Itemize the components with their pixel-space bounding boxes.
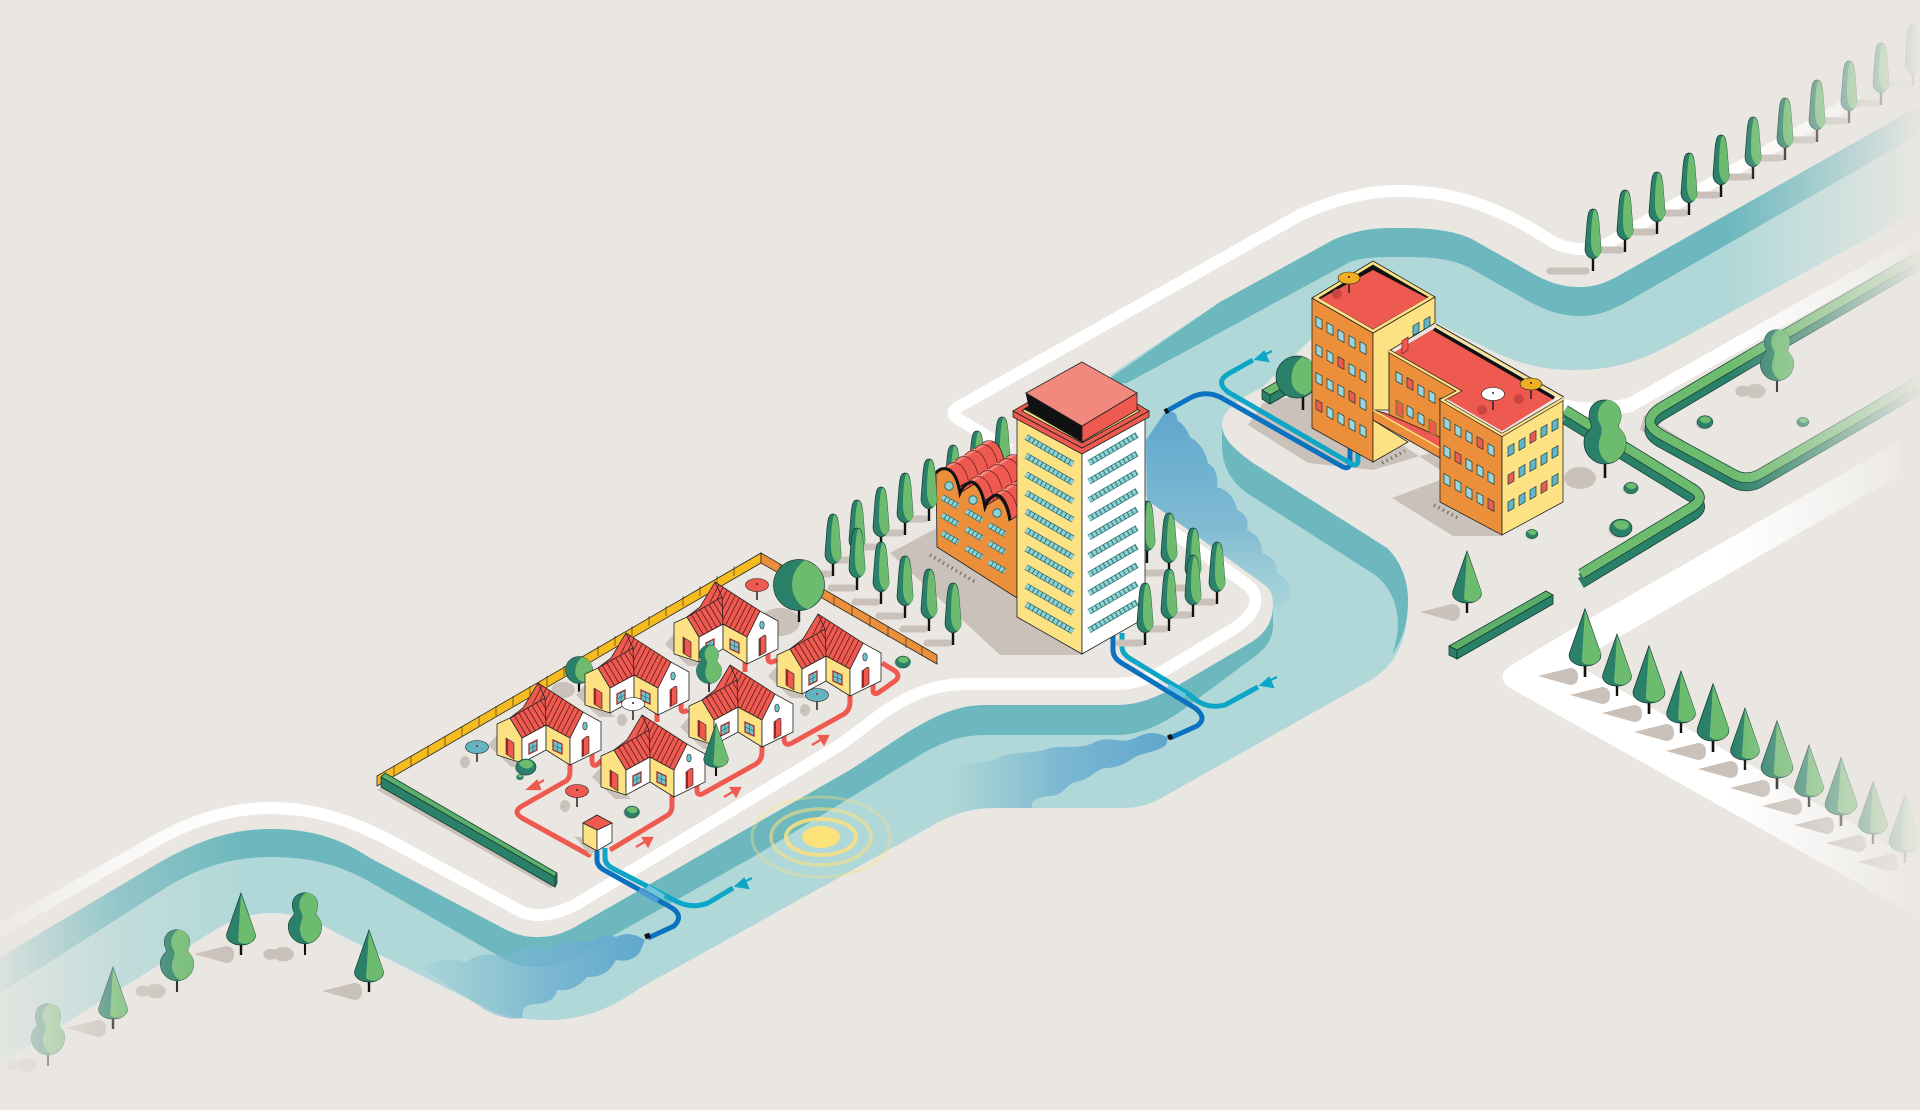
tower roof slab bbox=[1026, 362, 1137, 442]
arrow bbox=[812, 736, 828, 745]
water pipes: left outlet bbox=[597, 848, 752, 938]
bushes: by front-left house bbox=[514, 759, 536, 780]
tree: bubble right of office bbox=[1564, 400, 1626, 489]
tower yellow face bbox=[1017, 418, 1082, 654]
arrow bbox=[528, 780, 544, 789]
building shadows bbox=[377, 390, 1745, 888]
bush: near pump box bbox=[623, 806, 640, 819]
arrow bbox=[636, 838, 652, 847]
river bank band: upper bbox=[1100, 100, 1920, 385]
parasol: teal left bbox=[460, 740, 488, 768]
block B windows bbox=[1396, 372, 1436, 436]
balcony bbox=[1373, 410, 1440, 458]
shadow: factory and tower bbox=[890, 528, 1082, 655]
bush: by rear right house bbox=[894, 656, 910, 669]
factory bbox=[929, 440, 1017, 598]
trees: cypress row upper right bbox=[1550, 24, 1920, 271]
discharge wash: middle outlet bbox=[930, 733, 1168, 827]
tree: bubble between houses bbox=[696, 645, 722, 692]
discharge wash: left outlet bbox=[422, 934, 645, 1019]
factory front arches bbox=[936, 469, 1010, 520]
arrow bbox=[724, 788, 740, 797]
block A windows bbox=[1316, 316, 1366, 438]
edge fade: right bbox=[1730, 0, 1920, 1110]
hedge: front-left bbox=[381, 773, 557, 887]
trees: lower left bank bbox=[6, 893, 383, 1072]
pump box bbox=[574, 815, 612, 855]
hedge: loop on right bbox=[1650, 250, 1920, 486]
tree: cone by road junction bbox=[1420, 551, 1481, 621]
upper road bbox=[954, 97, 1860, 450]
rooftop parasol: orange left bbox=[1332, 272, 1360, 299]
tree: small round bbox=[551, 656, 592, 698]
trees: cypress row left of factory bbox=[807, 459, 961, 645]
block B middle wall bbox=[1389, 351, 1459, 447]
factory wall bbox=[936, 469, 1017, 598]
block A roof bbox=[1312, 261, 1435, 333]
tower cornice bbox=[1013, 371, 1149, 454]
tree: cone by middle houses bbox=[704, 723, 728, 776]
factory roof vaults bbox=[936, 440, 1017, 522]
hedge: around office bbox=[1565, 410, 1700, 583]
inflow pipe bbox=[605, 848, 733, 906]
house: rear centre bbox=[665, 582, 778, 666]
outflow pipe bbox=[597, 851, 679, 938]
fence: orange side bbox=[761, 553, 937, 664]
tree: large round bbox=[774, 560, 824, 622]
block B roof front rim bbox=[1389, 351, 1563, 435]
parasol: white bbox=[617, 698, 644, 726]
trees: cypress right of tower bbox=[1119, 542, 1225, 645]
discharge wash: upper outlet bbox=[1146, 412, 1290, 610]
shadow: large round tree bbox=[760, 608, 800, 636]
block C yellow face bbox=[1502, 399, 1563, 535]
ripple: underwater source bbox=[752, 797, 890, 877]
trees: cone row lower right bbox=[1538, 609, 1920, 871]
hedge: stub behind office bbox=[1262, 373, 1300, 404]
factory window strips bbox=[942, 497, 1005, 571]
edge fade: left bbox=[0, 0, 240, 1110]
lower road bbox=[0, 530, 1255, 936]
factory railing bbox=[930, 555, 977, 583]
shadow: office bbox=[1248, 390, 1502, 536]
block C windows right bbox=[1508, 418, 1558, 512]
right road bbox=[1555, 236, 1920, 409]
parasol: teal right bbox=[800, 688, 828, 716]
hedge: short front-right bbox=[1449, 591, 1553, 659]
water pipes: office bbox=[1165, 351, 1358, 468]
tower white face bbox=[1082, 418, 1145, 654]
block C windows left bbox=[1444, 418, 1494, 512]
water pipes: tower bbox=[1113, 633, 1277, 738]
parasol: red top bbox=[746, 578, 768, 600]
tree: bubble upper right bbox=[1735, 330, 1794, 398]
house: middle left bbox=[576, 633, 689, 717]
parasol: red front bbox=[560, 784, 588, 812]
river bank band: office platform wall bbox=[1222, 425, 1408, 655]
flow arrow bbox=[736, 878, 752, 888]
house: middle right bbox=[680, 665, 793, 749]
bushes: office grounds bbox=[1525, 482, 1638, 539]
white roads bbox=[0, 97, 1920, 936]
rooftop parasol: white bbox=[1477, 388, 1504, 415]
shadow: front hedge bbox=[377, 786, 557, 888]
block A yellow face lower bbox=[1373, 420, 1408, 462]
office building bbox=[1312, 261, 1564, 535]
flow arrows: red bbox=[528, 736, 828, 847]
bushes: inside right hedge loop bbox=[1696, 416, 1809, 429]
house: rear right bbox=[768, 614, 881, 698]
block A orange face bbox=[1312, 298, 1373, 462]
office railings bbox=[1382, 451, 1458, 518]
block A side windows and door bbox=[1402, 316, 1430, 354]
high-rise tower bbox=[1013, 362, 1149, 654]
block C orange face bbox=[1440, 398, 1502, 535]
lower-right road corner bbox=[1502, 441, 1920, 918]
rooftop parasol: orange right bbox=[1514, 378, 1542, 404]
house: front left bbox=[488, 683, 601, 767]
tower windows left bbox=[1026, 437, 1073, 631]
factory round windows bbox=[945, 482, 1001, 517]
heating pipes: red network bbox=[517, 648, 898, 855]
tree: cypress behind factory bbox=[945, 417, 1010, 507]
fence: yellow back bbox=[377, 553, 761, 786]
block A yellow face upper bbox=[1373, 297, 1435, 410]
tree: behind office bbox=[1276, 356, 1318, 410]
block B roof far edge bbox=[1434, 324, 1564, 398]
house: front middle bbox=[592, 715, 705, 799]
tower windows right bbox=[1089, 435, 1137, 630]
river bank band: lower bbox=[0, 605, 1273, 1000]
block B roof bbox=[1393, 328, 1555, 431]
trees: cypress behind tower bbox=[1121, 501, 1201, 590]
shadow: right hedge bbox=[1640, 415, 1745, 485]
